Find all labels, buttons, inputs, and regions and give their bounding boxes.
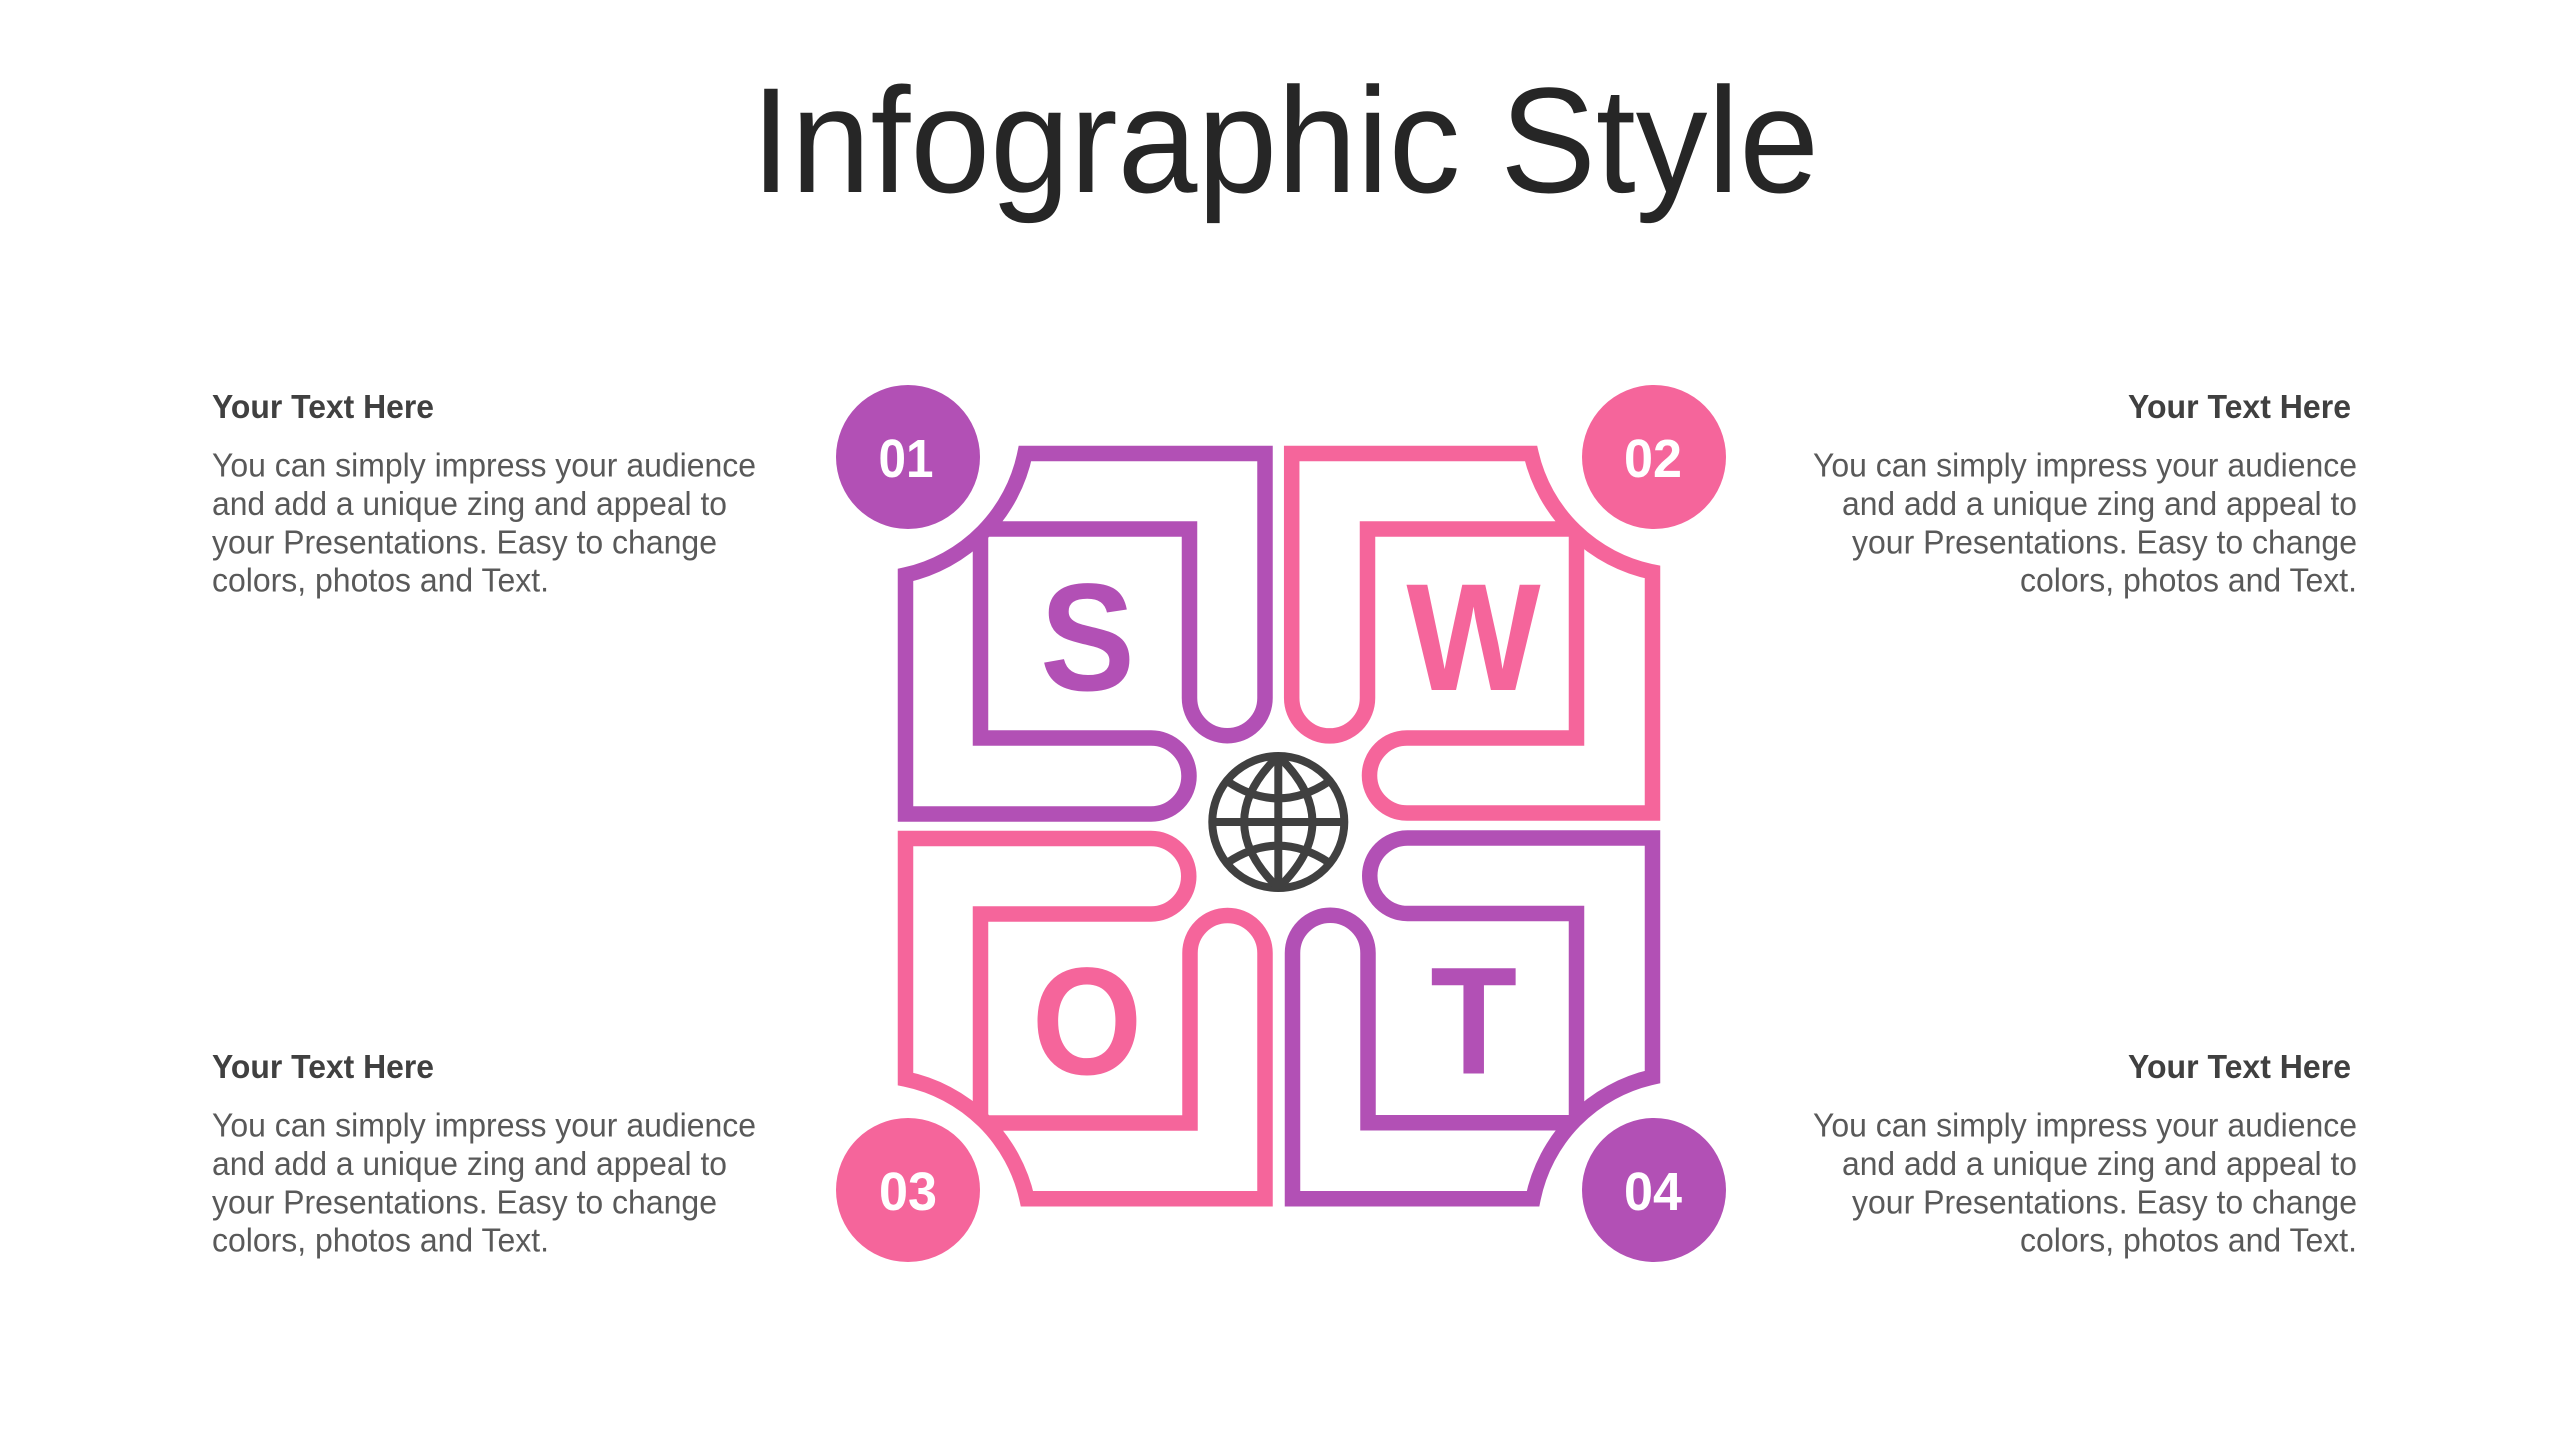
text block: top left — [212, 388, 756, 599]
body: top left: and add a unique zing and appeal to — [212, 485, 727, 522]
badge 01 — [836, 385, 980, 529]
badge 02 — [1582, 385, 1726, 529]
heading: top left: Your Text Here — [212, 388, 434, 425]
letter W: W — [1406, 552, 1541, 723]
body: bottom right: and add a unique zing and appeal to — [1842, 1145, 2357, 1182]
body: top right: and add a unique zing and appeal to — [1842, 485, 2357, 522]
body: top left: You can simply impress your audience — [212, 447, 756, 484]
text block: bottom right — [1813, 1048, 2357, 1259]
body: top right: your Presentations. Easy to change — [1852, 524, 2357, 560]
body: top right — [1813, 447, 2357, 599]
body: top right: You can simply impress your audience — [1813, 447, 2357, 484]
body: bottom right: your Presentations. Easy to change — [1852, 1184, 2357, 1220]
badge 03 — [836, 1118, 980, 1262]
badge 04 — [1582, 1118, 1726, 1262]
frame: W outline — [1292, 454, 1652, 813]
badge 01: 01 — [878, 429, 934, 489]
body: bottom left: your Presentations. Easy to change — [212, 1184, 717, 1220]
body: bottom right: You can simply impress your audience — [1813, 1107, 2357, 1144]
body: bottom left: and add a unique zing and appeal to — [212, 1145, 727, 1182]
badge 02: 02 — [1624, 429, 1682, 489]
body: bottom left: colors, photos and Text. — [212, 1222, 549, 1259]
body: top left: colors, photos and Text. — [212, 562, 549, 599]
text block: bottom left — [212, 1048, 756, 1259]
title: Infographic Style — [751, 56, 1819, 224]
letter T: T — [1430, 936, 1517, 1107]
body: top right: colors, photos and Text. — [2020, 562, 2357, 599]
text block: top right — [1813, 388, 2357, 599]
frame: S outline — [906, 454, 1265, 814]
icon: globe — [1212, 756, 1344, 888]
heading: bottom right: Your Text Here — [2128, 1048, 2351, 1085]
panel: S quadrant — [836, 385, 1265, 814]
panel: T quadrant — [1292, 838, 1726, 1262]
body: top left: your Presentations. Easy to change — [212, 524, 717, 560]
body: bottom right — [1813, 1107, 2357, 1259]
panel: W quadrant — [1292, 385, 1726, 813]
badge 04: 04 — [1624, 1162, 1682, 1222]
body: bottom left: You can simply impress your audience — [212, 1107, 756, 1144]
badge 03: 03 — [879, 1162, 937, 1222]
heading: top right: Your Text Here — [2128, 388, 2351, 425]
frame: T outline — [1292, 838, 1652, 1199]
body: top left — [212, 447, 756, 599]
panel: O quadrant — [836, 838, 1265, 1262]
letter O: O — [1032, 936, 1142, 1107]
heading: bottom left: Your Text Here — [212, 1048, 434, 1085]
body: bottom left — [212, 1107, 756, 1259]
body: bottom right: colors, photos and Text. — [2020, 1222, 2357, 1259]
letter S: S — [1040, 552, 1135, 723]
frame: O outline — [906, 838, 1265, 1199]
